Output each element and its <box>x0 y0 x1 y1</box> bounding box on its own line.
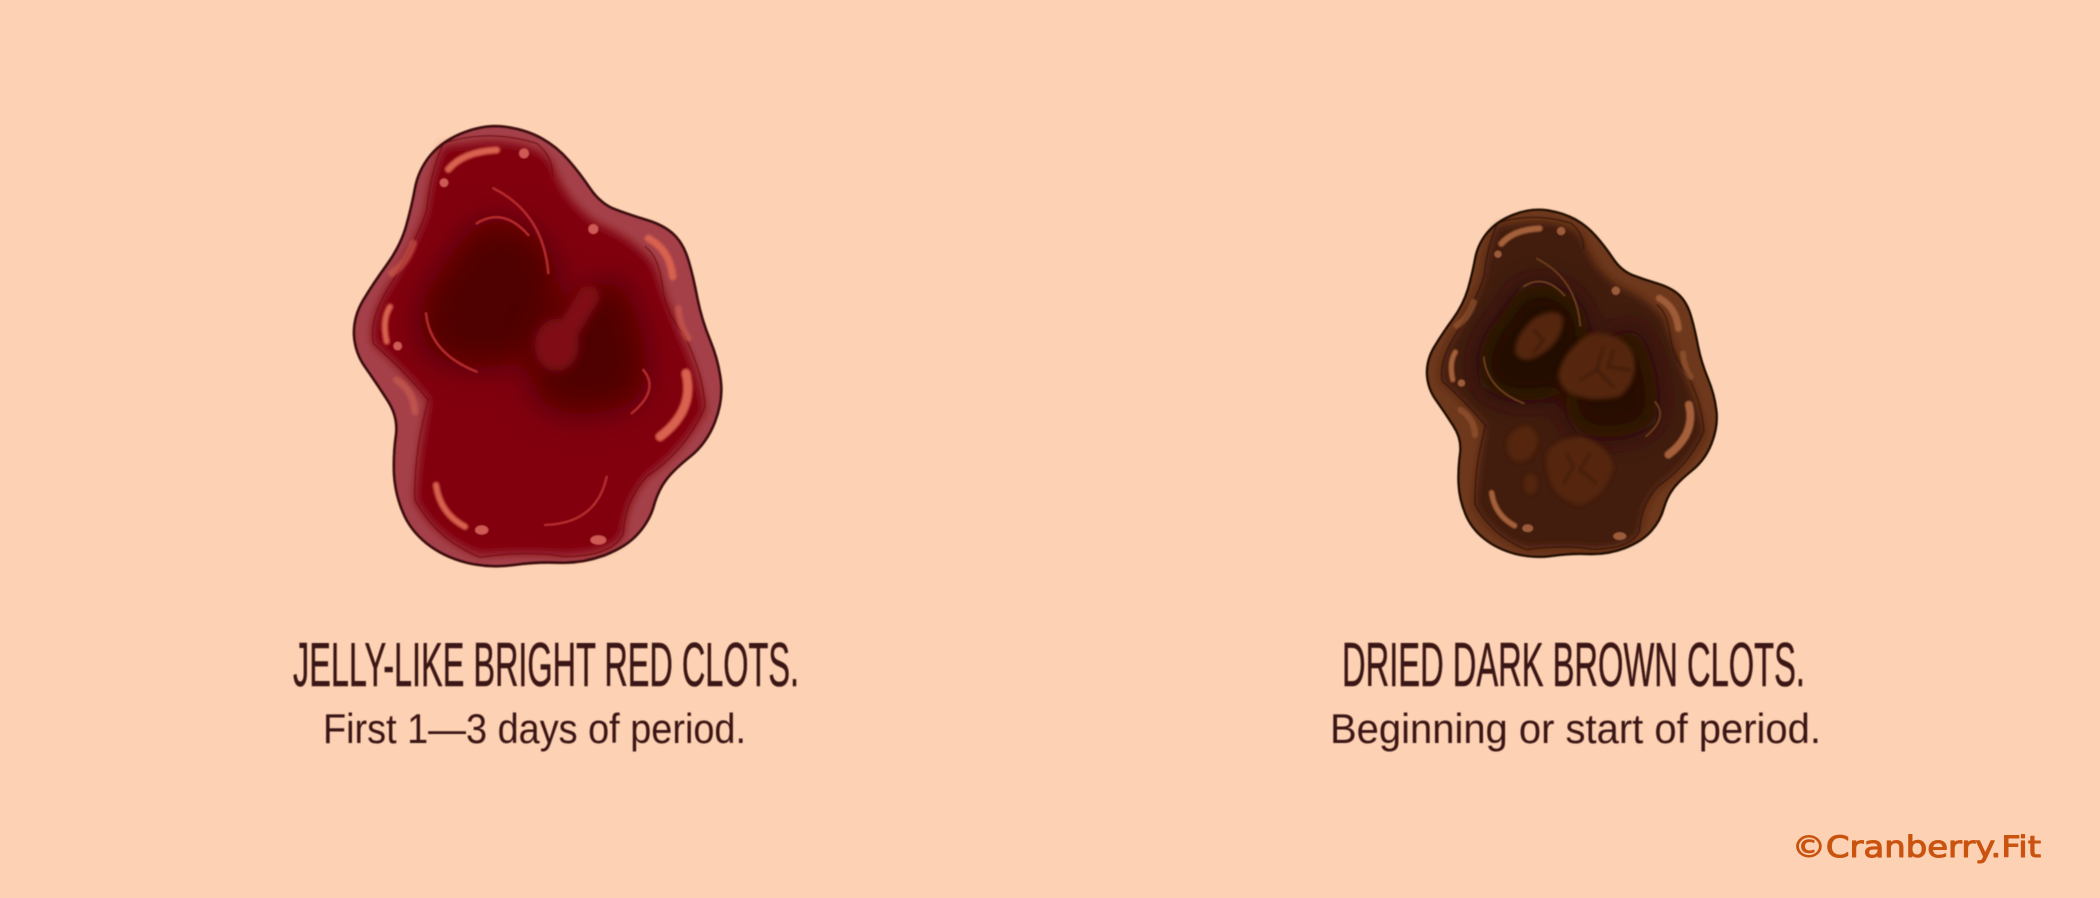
icon part: inner jelly fold <box>535 297 588 371</box>
watermark: Cranberry.Fit: ©Cranberry.Fit <box>1792 830 2041 864</box>
icon part: gloss dots <box>1458 227 1626 540</box>
subtitle: first 1-3 days: First 1—3 days of period. <box>323 705 746 752</box>
icon: dried brown clot <box>1427 210 1717 557</box>
icon part: gloss dots <box>393 148 606 545</box>
icon part: highlights <box>1451 228 1691 526</box>
panel: dried dark brown clots <box>1330 210 1821 752</box>
heading: jelly-like clots: JELLY-LIKE BRIGHT RED CLOTS. <box>293 631 799 700</box>
icon part: thin gloss arcs <box>1484 259 1660 436</box>
icon part: thin gloss arcs <box>426 188 650 525</box>
icon part: dried lumps <box>1507 312 1635 505</box>
icon: bright red jelly clot <box>354 126 721 566</box>
icon part: highlights <box>385 150 688 527</box>
panel: jelly-like bright red clots <box>293 126 799 752</box>
subtitle: beginning of period: Beginning or start of period. <box>1330 705 1821 752</box>
